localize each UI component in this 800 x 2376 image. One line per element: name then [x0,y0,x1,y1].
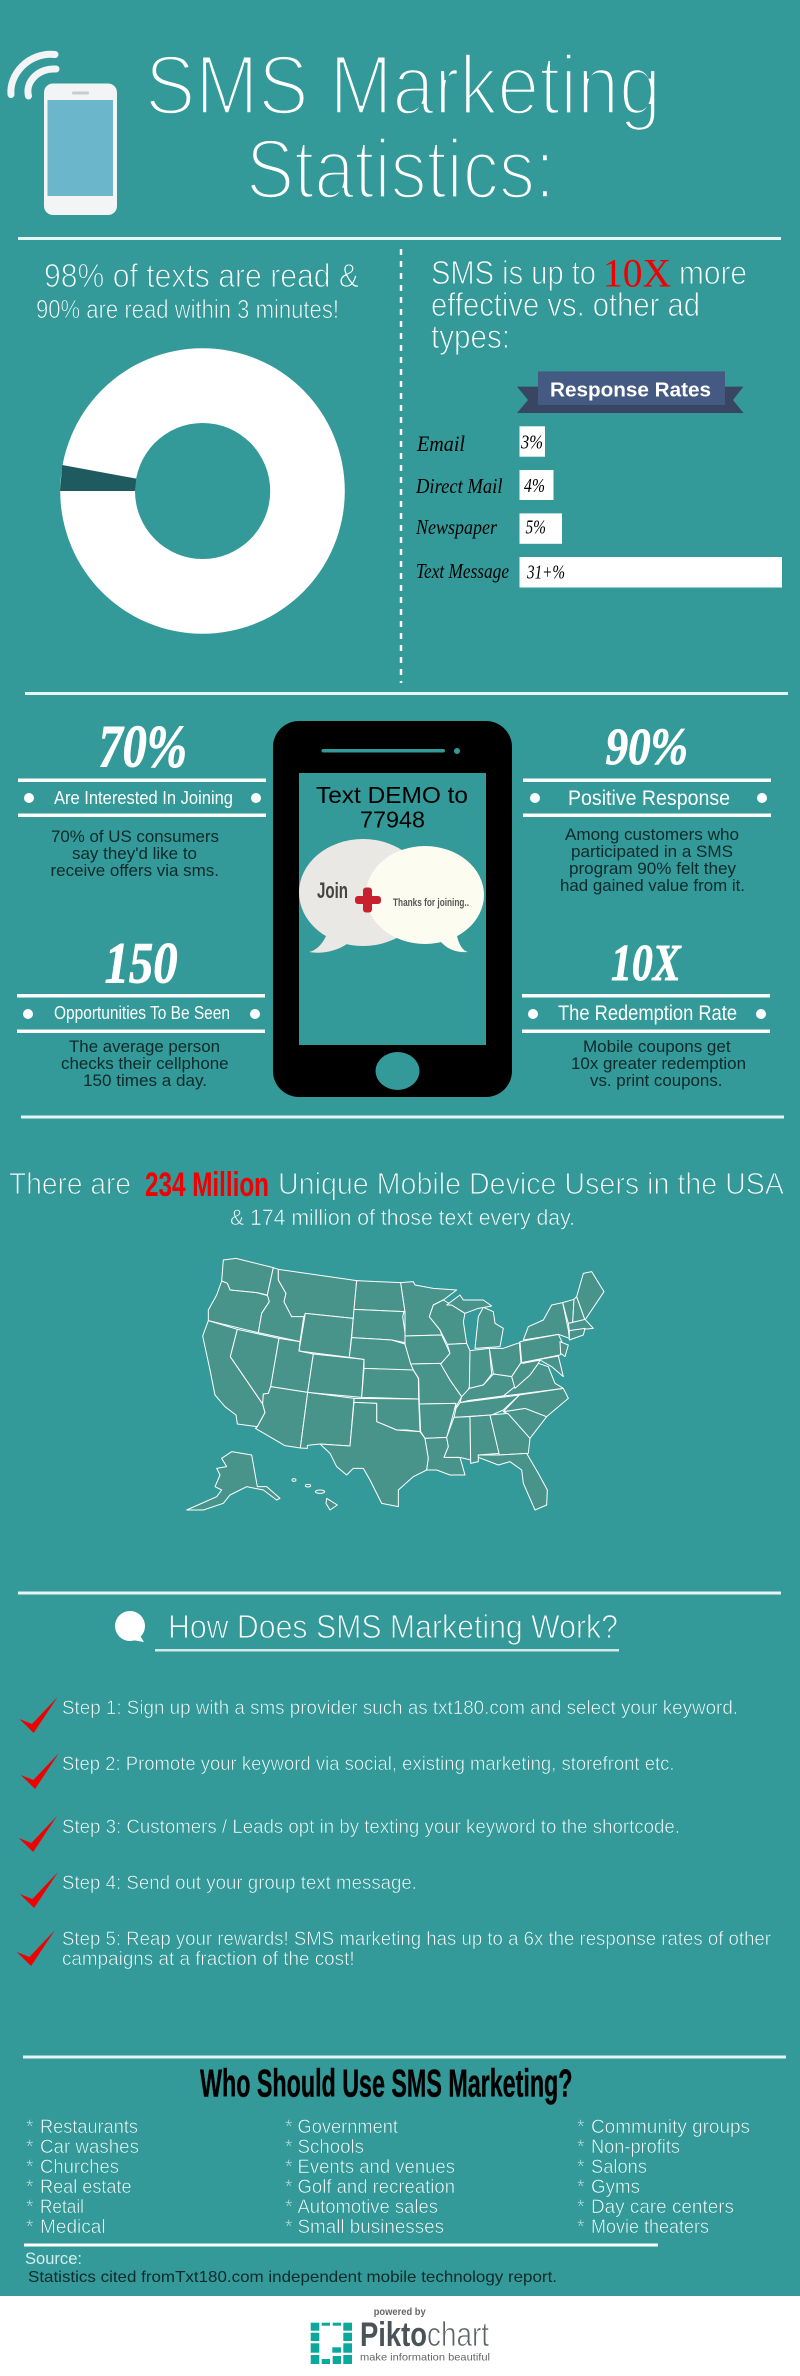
list: column 3: Salons [591,2156,647,2178]
footer: powered by Piktochart [0,2296,800,2376]
panel: stat 150: The average person [69,1037,220,1056]
icon: smartphone with signal [11,54,117,215]
panel: stat 70% [18,714,266,880]
list: column 3: * [577,2136,585,2158]
list: column 3: Day care centers [591,2196,734,2218]
list: column 1: * [26,2216,34,2238]
step 1: Step 1: Sign up with a sms provider such as txt180.com and select your keyword. [62,1697,738,1719]
list: column 1: Real estate [40,2176,132,2198]
panel: stat 10X: 10x greater redemption [571,1054,746,1073]
heading: mobile users: There are [9,1166,131,1201]
list: column 2: Small businesses [298,2216,444,2238]
panel: stat 10X: Mobile coupons get [583,1037,731,1056]
heading: 10X more effective: more [679,254,747,291]
list: column 3 [577,2116,750,2238]
list: column 2: * [285,2116,293,2138]
map of the USA [187,1258,604,1510]
list: column 2: Automotive sales [298,2196,438,2218]
list: column 2: Events and venues [298,2156,455,2178]
list: column 3: Movie theaters [591,2216,709,2238]
footer: powered by Piktochart: powered by [374,2307,426,2318]
list: column 3: * [577,2196,585,2218]
heading: 10X more effective: types: [431,318,510,355]
list: column 2: * [285,2216,293,2238]
phone screen text: Text DEMO to [316,782,468,808]
step 4 [20,1872,417,1908]
bar chart: response rates: 3% [520,432,543,454]
bar chart: response rates: 31+% [526,562,565,584]
banner: response rates: Response Rates [550,379,711,401]
footer: powered by Piktochart: make information beautiful [360,2352,490,2364]
heading: 10X more effective: 10X [603,250,671,296]
step 4: Step 4: Send out your group text message. [62,1872,417,1894]
chat bubbles: Join [317,878,348,903]
panel: stat 150: checks their cellphone [61,1054,229,1073]
panel: stat 150: 150 times a day. [83,1071,207,1090]
list: column 2: * [285,2136,293,2158]
title: Statistics: [246,122,555,216]
heading: how does it work: How Does SMS Marketing Work? [168,1608,618,1645]
panel: stat 70%: 70% of US consumers [51,827,219,846]
list: column 3: Gyms [591,2176,640,2198]
illustration: black phone [273,721,512,1097]
list: column 1: * [26,2196,34,2218]
phone screen text: 77948 [360,807,425,833]
list: column 3: * [577,2216,585,2238]
chat bubbles [299,839,484,953]
list: column 1: Retail [40,2196,84,2218]
panel: stat 70%: say they'd like to [72,844,197,863]
panel: stat 70%: Are Interested In Joining [54,788,233,808]
footer: powered by Piktochart: Pikto [360,2316,427,2354]
panel: stat 90%: had gained value from it. [560,876,745,895]
panel: stat 10X [522,935,770,1090]
panel: stat 150: Opportunities To Be Seen [54,1003,230,1023]
panel: stat 10X: vs. print coupons. [590,1071,722,1090]
heading: 10X more effective: SMS is up to [431,254,596,291]
panel: stat 90%: 90% [606,719,688,776]
heading: read rates [36,257,359,324]
bar chart: response rates: Newspaper [415,515,498,539]
bar chart: response rates: Direct Mail [415,474,503,498]
list: column 3: * [577,2116,585,2138]
heading: mobile users [9,1166,784,1230]
list: column 1: Car washes [40,2136,139,2158]
panel: stat 150: 150 [105,931,178,996]
header [11,38,661,216]
list: column 1: Medical [40,2216,106,2238]
list: column 1 [26,2116,139,2238]
heading: mobile users: 234 Million [145,1166,269,1204]
phone screen text [316,782,468,833]
panel: stat 90%: program 90% felt they [569,859,736,878]
list: column 2 [285,2116,455,2238]
panel: stat 90%: participated in a SMS [571,842,733,861]
step 2 [21,1753,675,1789]
footer: powered by Piktochart: chart [427,2316,489,2354]
step 5: Step 5: Reap your rewards! SMS marketing has up to a 6x the response rates of other [62,1928,771,1950]
list: column 3: Non-profits [591,2136,680,2158]
list: column 1: Churches [40,2156,119,2178]
step 5 [17,1928,771,1970]
panel: response rates [415,250,782,588]
panel: stat 90% [523,719,771,895]
list: column 2: Schools [298,2136,364,2158]
chat bubbles: Thanks for joining.. [393,897,469,909]
panel: read rates [36,257,359,634]
heading: read rates: 98% of texts are read & [44,257,359,294]
panel: stat 70%: receive offers via sms. [50,861,219,880]
icon: speech bubble [115,1611,145,1642]
list: column 1: * [26,2116,34,2138]
step 3 [19,1816,680,1852]
panel: stat 10X: 10X [611,935,682,992]
list: column 1: * [26,2176,34,2198]
list: column 2: * [285,2176,293,2198]
list: column 2: Government [298,2116,399,2138]
panel: stat 70%: 70% [98,714,187,780]
heading: 10X more effective [431,250,747,355]
panel: stat 90%: Among customers who [565,825,739,844]
title [145,38,661,216]
step 1 [19,1697,738,1733]
heading: 10X more effective: effective vs. other ad [431,286,700,323]
bar chart: response rates [415,426,782,588]
panel: stat 90%: Positive Response [568,787,730,810]
panel: steps [17,1697,771,1970]
step 5: campaigns at a fraction of the cost! [62,1948,355,1970]
source note [25,2249,557,2286]
list: column 3: * [577,2156,585,2178]
list: column 2: * [285,2196,293,2218]
heading: mobile users: & 174 million of those text every day. [230,1205,575,1230]
heading: read rates: 90% are read within 3 minutes! [36,294,339,324]
icon: Piktochart logo [311,2323,352,2364]
list: column 3: Community groups [591,2116,750,2138]
list: column 1: * [26,2156,34,2178]
title: SMS Marketing [145,38,661,132]
banner: response rates [517,371,744,413]
list: column 3: * [577,2176,585,2198]
source note: Source: [25,2249,82,2268]
list: column 1: Restaurants [40,2116,138,2138]
list: column 2: Golf and recreation [298,2176,455,2198]
source note: Statistics cited fromTxt180.com independent mobile technology report. [28,2269,557,2286]
bar chart: response rates: 4% [524,475,545,497]
donut chart [60,348,345,634]
panel: stat 150 [17,931,265,1090]
list: column 2: * [285,2156,293,2178]
list: column 1: * [26,2136,34,2158]
bar chart: response rates: Text Message [416,559,509,583]
bar chart: response rates: 5% [526,516,546,538]
step 3: Step 3: Customers / Leads opt in by texting your keyword to the shortcode. [62,1816,680,1838]
step 2: Step 2: Promote your keyword via social, existing marketing, storefront etc. [62,1753,674,1775]
bar chart: response rates: Email [416,431,465,456]
panel: stat 10X: The Redemption Rate [558,1002,737,1025]
